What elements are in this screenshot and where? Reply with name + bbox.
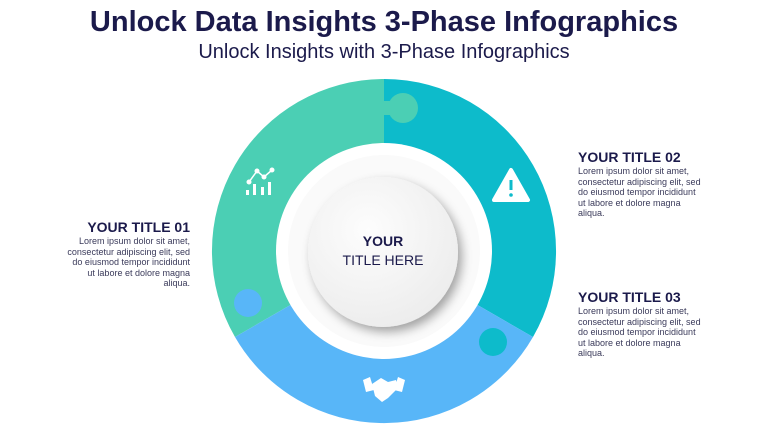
text block 01: consectetur adipiscing elit, sed	[67, 247, 190, 257]
text block 03	[578, 289, 701, 358]
text block 02: Lorem ipsum dolor sit amet,	[578, 166, 689, 176]
text block 01: Lorem ipsum dolor sit amet,	[79, 236, 190, 246]
text block 01: aliqua.	[163, 278, 190, 288]
subtitle: Unlock Insights with 3-Phase Infographics	[198, 41, 570, 63]
icon: handshake	[363, 377, 405, 402]
segment: blue (03)	[235, 251, 533, 423]
text block 02: do eiusmod tempor incididunt	[578, 187, 696, 197]
text block 02: YOUR TITLE 02	[578, 149, 681, 165]
title: Unlock Data Insights 3-Phase Infographics	[90, 6, 678, 38]
segment: green (01)	[212, 79, 384, 337]
segment: teal (02)	[384, 79, 556, 337]
text block 01: YOUR TITLE 01	[87, 219, 190, 235]
text block 03: do eiusmod tempor incididunt	[578, 327, 696, 337]
icon: chart	[246, 168, 274, 195]
text block 03: consectetur adipiscing elit, sed	[578, 317, 701, 327]
text block 01: ut labore et dolore magna	[87, 268, 190, 278]
text block 03: ut labore et dolore magna	[578, 338, 681, 348]
center button: TITLE HERE	[343, 252, 423, 268]
text block 03: Lorem ipsum dolor sit amet,	[578, 306, 689, 316]
puzzle tabs	[234, 93, 507, 356]
text block 01: do eiusmod tempor incididunt	[72, 257, 190, 267]
white ring	[276, 143, 492, 359]
text block 02: aliqua.	[578, 208, 605, 218]
text block 03: aliqua.	[578, 348, 605, 358]
text block 02: consectetur adipiscing elit, sed	[578, 177, 701, 187]
text block 01	[67, 219, 190, 288]
text block 02: ut labore et dolore magna	[578, 198, 681, 208]
icon: warning	[494, 170, 528, 200]
text block 03: YOUR TITLE 03	[578, 289, 681, 305]
center button: YOUR	[363, 233, 403, 249]
center button	[308, 177, 458, 327]
text block 02	[578, 149, 701, 218]
